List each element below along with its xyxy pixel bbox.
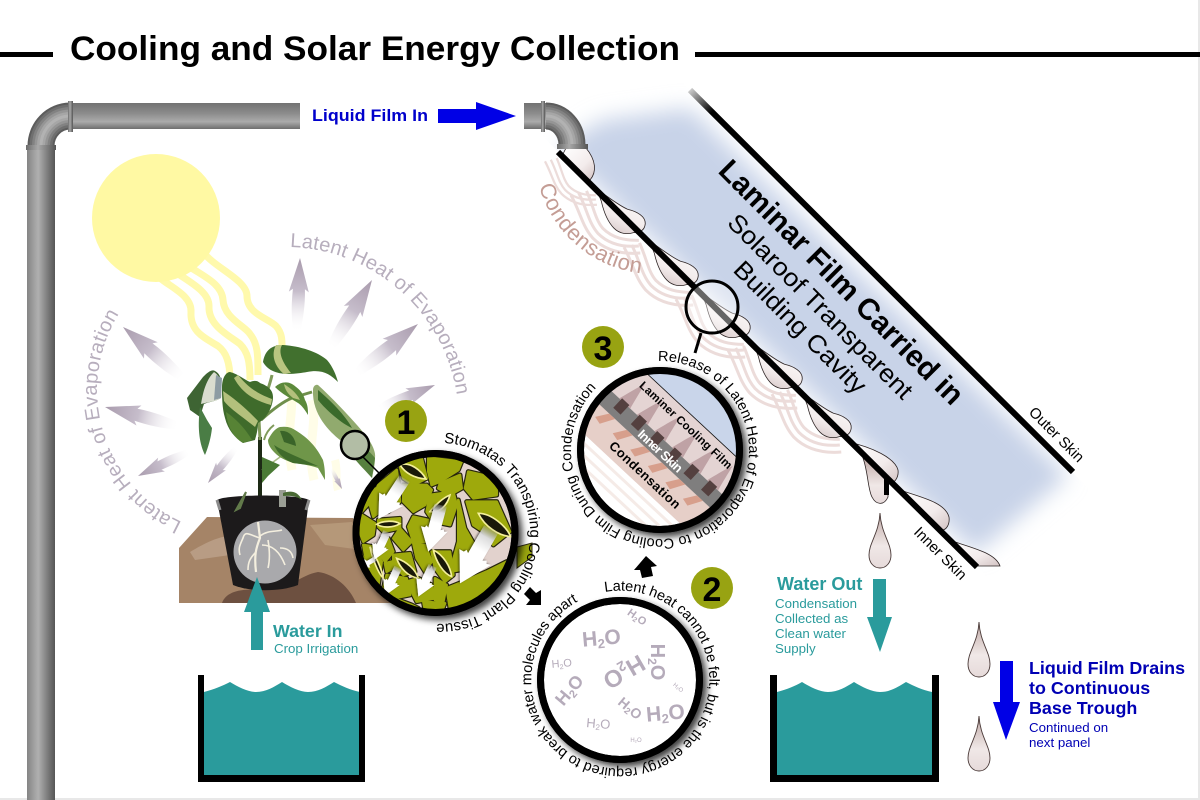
arrow: stomata to latent heat [524,587,541,605]
label: liquid film drains [1029,658,1185,750]
film blue area [648,374,736,456]
leaf: top [263,345,338,382]
leaf: hanging left [199,407,212,455]
label: water out: Clean water [775,626,847,641]
badge 2 [691,567,733,609]
water molecule labels: H [551,686,575,709]
leaf cells [355,458,511,612]
water molecule labels: O [598,661,628,694]
stomata [370,464,511,578]
water molecule labels: H [551,658,560,671]
droplet: drain upper [968,622,990,677]
icon: sun disc [92,154,220,282]
plant stem [259,375,312,500]
label: water out: Supply [775,641,816,656]
water molecule labels: 2 [622,706,632,716]
arrow: water out [867,579,892,652]
inner skin band [599,391,722,508]
water molecule labels: H [621,649,649,681]
panel: building cavity [560,108,1068,554]
leaf tail [517,543,532,568]
water molecule labels: H [645,702,662,727]
label: water out: Condensation [775,596,857,611]
label: liquid film drains: next panel [1029,735,1090,750]
label: inner skin: Inner Skin [910,524,970,584]
outer skin line [690,90,1073,472]
condensation arcs under inner skin [537,153,847,468]
droplet: drain lower [968,716,990,771]
label: solaroof: Solaroof Transparent [722,208,918,405]
label: inner skin: Inner Skin [635,426,686,476]
water molecule labels: O [563,671,588,695]
arrow: water in [244,577,270,650]
label: outer skin: Outer Skin [1025,404,1087,466]
water molecule labels: 2 [595,723,601,732]
pot [217,490,309,590]
label: water out: Water Out [777,574,862,594]
water molecule labels: H₂O [630,738,642,744]
label: liquid film drains: Liquid Film Drains [1029,658,1185,678]
ring outline [356,454,515,612]
water molecule labels: O [667,700,686,725]
title bar [0,30,1200,68]
label: water in: Crop Irrigation [274,641,358,656]
leaf: side small [275,382,308,415]
label: liquid film drains: to Continuous [1029,678,1150,698]
sun [92,154,338,490]
arrow: liquid film in [438,102,516,130]
label: liquid film in: Liquid Film In [312,106,428,125]
trough: left [198,675,365,782]
water molecule labels: O [603,625,622,650]
right feed pipe elbow [524,101,588,149]
water molecule labels: O [627,703,645,723]
label: liquid film drains: Continued on [1029,720,1108,735]
soil block [179,517,392,603]
water molecule labels: 2 [597,636,606,651]
water molecule labels: 2 [559,664,564,671]
latent heat arrows [103,258,438,491]
water molecule labels: H [646,644,668,658]
panel: latent heat water molecules circle [540,600,700,760]
water molecule labels: 2 [614,658,629,675]
left feed pipe [26,101,300,800]
badge 3 [582,326,624,368]
condensation droplets on inner skin [562,148,1000,566]
water molecule labels: 2 [661,711,670,726]
label: water in: Water In [273,621,342,641]
water molecule labels: O [646,665,668,680]
circular label: latent heat cannot be felt: Latent heat cannot be felt, but is the energy required to break water molecules apart [522,581,720,778]
label: laminer cooling film: Laminer Cooling Film [637,380,734,472]
label: laminar film: Laminar Film Carried in [712,154,970,412]
title: Cooling and Solar Energy Collection [70,30,680,68]
leaf: lower [262,457,280,483]
leaf: right large [313,385,375,478]
badge 1 [385,400,427,442]
label: water out: Collected as [775,611,849,626]
water molecule labels: O [563,657,573,670]
icon: leaf magnifier [341,431,380,474]
label: building cavity: Building Cavity [728,255,872,400]
water molecule labels: 2 [567,688,580,701]
cavity labels [712,154,1087,584]
water molecule labels: O [600,716,611,732]
sun rays [160,252,338,490]
badge 1: 1 [397,404,415,442]
transpiration arrows [364,475,498,597]
trough: right [770,675,939,782]
arrow: latent heat to release [634,556,657,578]
panel: stomata circle [355,454,532,612]
water molecule labels: H [615,694,633,712]
roots [239,522,293,572]
leaf: mid [268,427,325,480]
water molecule labels: H₂O [671,682,684,694]
inner skin line [558,152,977,567]
label: latent heat left: Latent Heat of Evaporation [84,310,180,534]
water molecule labels: 2 [645,658,659,665]
water molecule labels [551,607,686,744]
circular label: stomatas: Stomatas Transpiring Cooling Plant Tissue [436,432,540,632]
water molecule labels: 2 [631,616,638,624]
label: liquid film drains: Base Trough [1029,698,1137,718]
label: latent heat right: Latent Heat of Evaporation [292,233,467,394]
circular label: release of latent heat: Release of Latent Heat of Evaporation to Cooling Film During Condensation [561,351,758,549]
icon: magnifier on skin [686,281,738,353]
badge 2: 2 [703,571,721,609]
leaf: far left [187,370,221,417]
condensation spikes [595,384,732,506]
water molecule labels: O [635,614,649,629]
skins [558,90,1073,567]
leaf: centre [222,372,273,443]
label: water out [775,574,862,656]
label: water in [273,621,358,656]
root window [234,520,296,584]
label: condensation: Condensation [606,438,684,512]
label: condensation curved: Condensation [540,184,641,274]
water molecule labels: H [586,715,596,731]
water molecule labels: H [581,627,598,652]
water molecule labels: H [625,607,638,621]
panel: condensation close-up circle [576,366,752,542]
ring backing [356,454,515,612]
plant [187,345,375,500]
arrow: liquid film drains [993,661,1020,740]
droplet: falling from skin [869,513,891,568]
badge 3: 3 [594,330,612,368]
